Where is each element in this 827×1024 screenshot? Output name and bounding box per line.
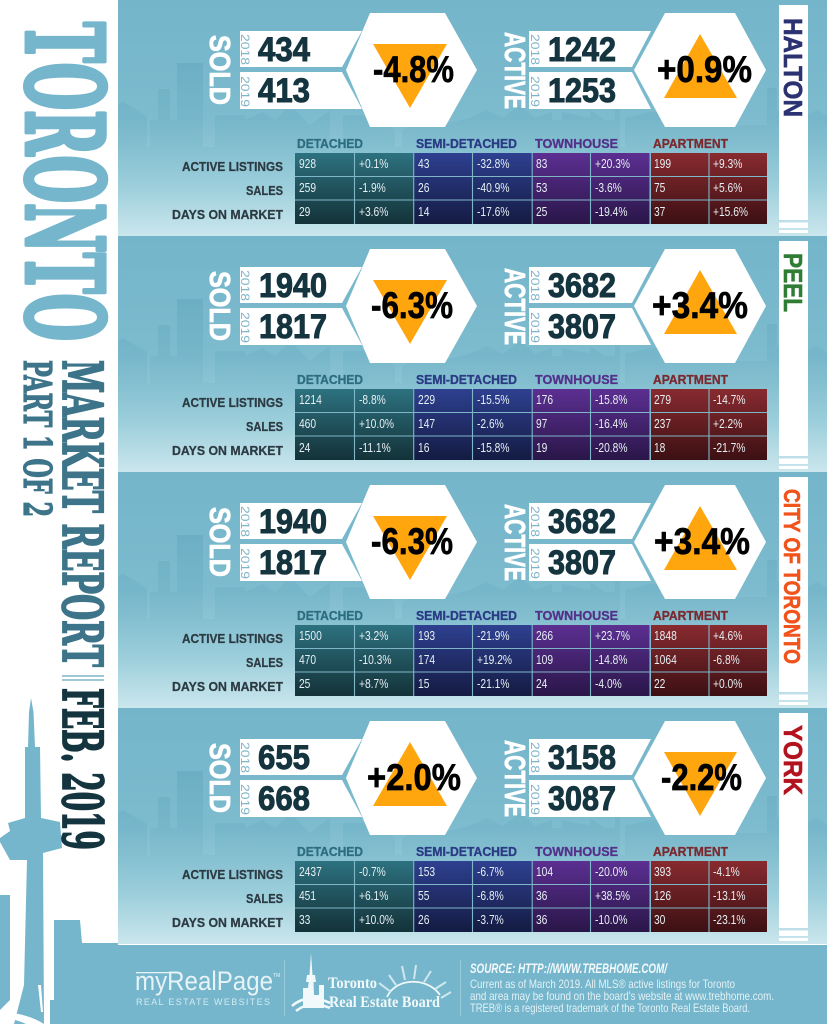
table: 24 (299, 442, 311, 455)
sold figures: 2019 (238, 312, 252, 343)
table: 199 (654, 158, 671, 171)
footer band (118, 945, 827, 1024)
active figures: 3807 (548, 308, 616, 346)
table: -3.7% (477, 914, 504, 927)
table: 16 (418, 442, 429, 455)
table: 153 (418, 866, 435, 879)
table: SEMI-DETACHED (416, 608, 517, 623)
logo: myRealPage (135, 966, 280, 1007)
subtitle: part number: PART 1 OF 2 (15, 360, 60, 517)
table (172, 608, 767, 696)
active change badge (661, 752, 742, 816)
sold figures: 1817 (259, 308, 327, 346)
table: 83 (536, 158, 547, 171)
table: -6.8% (713, 654, 740, 667)
table: 279 (654, 394, 671, 407)
table: 928 (299, 158, 316, 171)
active figures: 1242 (548, 31, 616, 69)
source note (470, 960, 774, 1015)
table: +8.7% (359, 678, 388, 691)
source note: TREB® is a registered trademark of the Toronto Real Estate Board. (470, 1001, 750, 1015)
table: -6.7% (477, 866, 504, 879)
table: TOWNHOUSE (535, 136, 618, 151)
sold label: SOLD (203, 743, 235, 813)
table: 33 (299, 914, 310, 927)
sold figures: 413 (258, 72, 310, 110)
active change badge (652, 270, 748, 334)
table: 37 (654, 206, 665, 219)
active figures (528, 31, 616, 110)
sold change badge (371, 280, 453, 344)
table: -0.7% (359, 866, 386, 879)
table: DAYS ON MARKET (172, 915, 283, 930)
logo: myRealPage: REAL ESTATE WEBSITES (136, 997, 270, 1007)
table: SALES (246, 891, 283, 906)
table (172, 372, 767, 460)
region name: Halton: HALTON (778, 18, 808, 117)
table: -10.3% (359, 654, 391, 667)
active figures (528, 267, 616, 346)
table: 19 (536, 442, 547, 455)
active change badge: -2.2% (661, 757, 742, 798)
table: 2437 (299, 866, 322, 879)
table: DAYS ON MARKET (172, 443, 283, 458)
table: SEMI-DETACHED (416, 844, 517, 859)
divider between report and date (62, 676, 104, 680)
table: ACTIVE LISTINGS (182, 159, 283, 174)
active figures: 2019 (528, 76, 542, 107)
table: DAYS ON MARKET (172, 679, 283, 694)
table: 29 (299, 206, 310, 219)
active figures: 2019 (528, 548, 542, 579)
table: 43 (418, 158, 429, 171)
panel: City of Toronto (118, 472, 827, 708)
sold figures: 2018 (238, 34, 252, 65)
source note: SOURCE: HTTP://WWW.TREBHOME.COM/ (470, 960, 668, 976)
region name: York: YORK (778, 725, 808, 795)
table: +10.0% (359, 418, 394, 431)
table: APARTMENT (653, 136, 728, 151)
sold change badge: +2.0% (367, 757, 461, 798)
sold figures: 1817 (259, 544, 327, 582)
active figures: 1253 (548, 72, 616, 110)
sold figures (238, 31, 310, 110)
table: DAYS ON MARKET (172, 207, 283, 222)
table: 26 (418, 914, 429, 927)
table: 26 (418, 182, 429, 195)
table: -6.8% (477, 890, 504, 903)
logo: Toronto Real Estate Board: Real Estate Board (329, 994, 440, 1011)
subtitle: Market Report: MARKET REPORT (50, 360, 115, 667)
source note: Current as of March 2019. All MLS® active listings for Toronto (470, 977, 735, 991)
table: 237 (654, 418, 671, 431)
table: 393 (654, 866, 671, 879)
table: -1.9% (359, 182, 386, 195)
table: +3.2% (359, 630, 388, 643)
table: 126 (654, 890, 671, 903)
table: DETACHED (297, 608, 363, 623)
table: -21.1% (477, 678, 509, 691)
sold figures: 2018 (238, 742, 252, 773)
active change badge: +3.4% (654, 521, 750, 562)
logo: Toronto Real Estate Board: Toronto (328, 975, 377, 992)
table: -15.8% (477, 442, 509, 455)
panel: Halton (118, 0, 827, 236)
table: 470 (299, 654, 316, 667)
table: +6.1% (359, 890, 388, 903)
sold figures: 434 (258, 31, 310, 69)
table: TOWNHOUSE (535, 372, 618, 387)
table: +0.1% (359, 158, 388, 171)
table: -2.6% (477, 418, 504, 431)
active change badge (654, 506, 750, 570)
table: SEMI-DETACHED (416, 372, 517, 387)
title: Toronto: TORONTO (2, 22, 127, 341)
sold figures: 655 (258, 739, 310, 777)
sold figures: 2019 (238, 548, 252, 579)
sold figures (238, 503, 327, 582)
table: 147 (418, 418, 435, 431)
active figures: 3682 (548, 267, 616, 305)
table: -15.8% (595, 394, 627, 407)
table: ACTIVE LISTINGS (182, 631, 283, 646)
white swoosh across the tower base (0, 985, 44, 1024)
table: APARTMENT (653, 608, 728, 623)
logo: myRealPage: myRealPage (135, 966, 273, 996)
table: SALES (246, 419, 283, 434)
table (172, 844, 767, 932)
table: +5.6% (713, 182, 742, 195)
table: SALES (246, 183, 283, 198)
table: -20.8% (595, 442, 627, 455)
table: 22 (654, 678, 665, 691)
table: 266 (536, 630, 553, 643)
table: -4.1% (713, 866, 740, 879)
logo: Toronto Real Estate Board (292, 953, 451, 1011)
table (172, 136, 767, 224)
table: 176 (536, 394, 553, 407)
sold figures (238, 267, 327, 346)
table: SALES (246, 655, 283, 670)
sold figures: 2018 (238, 270, 252, 301)
table: 55 (418, 890, 429, 903)
active change badge (657, 34, 752, 98)
table: 193 (418, 630, 435, 643)
sold change badge (371, 516, 453, 580)
table: ACTIVE LISTINGS (182, 867, 283, 882)
sold change badge (367, 742, 461, 806)
table: 15 (418, 678, 429, 691)
region name: City of Toronto: CITY OF TORONTO (779, 489, 805, 664)
active figures: 2018 (528, 34, 542, 65)
active label: ACTIVE (498, 268, 530, 345)
table: -20.0% (595, 866, 627, 879)
sold figures (238, 739, 310, 818)
sold figures: 2018 (238, 506, 252, 537)
active label: ACTIVE (498, 504, 530, 581)
table: 75 (654, 182, 665, 195)
sold figures: 1940 (259, 267, 327, 305)
table: -14.7% (713, 394, 745, 407)
table: DETACHED (297, 844, 363, 859)
active change badge: +3.4% (652, 285, 748, 326)
table: -21.9% (477, 630, 509, 643)
table: ACTIVE LISTINGS (182, 395, 283, 410)
table: -21.7% (713, 442, 745, 455)
sold label: SOLD (203, 271, 235, 341)
table: 460 (299, 418, 316, 431)
sold change badge: -6.3% (371, 521, 453, 562)
active label: ACTIVE (498, 740, 530, 817)
sold change badge: -6.3% (371, 285, 453, 326)
table: +2.2% (713, 418, 742, 431)
active figures: 2019 (528, 312, 542, 343)
table: +0.0% (713, 678, 742, 691)
sold label: SOLD (203, 35, 235, 105)
logo: myRealPage: TM (273, 973, 280, 979)
table: APARTMENT (653, 372, 728, 387)
table: 30 (654, 914, 665, 927)
table: -32.8% (477, 158, 509, 171)
table: DETACHED (297, 136, 363, 151)
active figures: 2019 (528, 784, 542, 815)
active figures: 3158 (548, 739, 616, 777)
table: 1214 (299, 394, 322, 407)
active figures (528, 503, 616, 582)
table: 25 (299, 678, 310, 691)
sold figures: 2019 (238, 76, 252, 107)
table: -13.1% (713, 890, 745, 903)
region name: Peel: PEEL (778, 253, 808, 312)
table: -19.4% (595, 206, 627, 219)
table: +3.6% (359, 206, 388, 219)
table: -11.1% (359, 442, 391, 455)
table: 14 (418, 206, 430, 219)
table: -40.9% (477, 182, 509, 195)
table: 109 (536, 654, 553, 667)
table: TOWNHOUSE (535, 844, 618, 859)
sold label: SOLD (203, 507, 235, 577)
sold figures: 1940 (259, 503, 327, 541)
table: +10.0% (359, 914, 394, 927)
table: 259 (299, 182, 316, 195)
table: +38.5% (595, 890, 630, 903)
table: APARTMENT (653, 844, 728, 859)
table: 36 (536, 914, 547, 927)
table: 104 (536, 866, 554, 879)
table: 24 (536, 678, 548, 691)
table: +20.3% (595, 158, 630, 171)
table: +9.3% (713, 158, 742, 171)
active figures: 2018 (528, 270, 542, 301)
table: 451 (299, 890, 316, 903)
table: 36 (536, 890, 547, 903)
table: -17.6% (477, 206, 509, 219)
table: +15.6% (713, 206, 748, 219)
active figures: 3682 (548, 503, 616, 541)
active figures: 3807 (548, 544, 616, 582)
active figures: 3087 (548, 780, 616, 818)
table: 97 (536, 418, 547, 431)
table: DETACHED (297, 372, 363, 387)
table: -15.5% (477, 394, 509, 407)
active figures (528, 739, 616, 818)
sold figures: 668 (258, 780, 310, 818)
illustration: CN Tower and skyline (0, 698, 118, 1024)
active figures: 2018 (528, 742, 542, 773)
table: 229 (418, 394, 435, 407)
table: 174 (418, 654, 436, 667)
table: 1848 (654, 630, 677, 643)
table: +19.2% (477, 654, 512, 667)
table: -14.8% (595, 654, 627, 667)
active change badge: +0.9% (657, 49, 752, 90)
active label: ACTIVE (498, 32, 530, 109)
sold change badge (373, 44, 454, 108)
table: 1500 (299, 630, 322, 643)
table: -8.8% (359, 394, 386, 407)
table: TOWNHOUSE (535, 608, 618, 623)
table: -23.1% (713, 914, 745, 927)
table: +4.6% (713, 630, 742, 643)
table: 1064 (654, 654, 677, 667)
table: 53 (536, 182, 547, 195)
table: -16.4% (595, 418, 627, 431)
active figures: 2018 (528, 506, 542, 537)
table: 18 (654, 442, 665, 455)
table: -3.6% (595, 182, 622, 195)
table: +23.7% (595, 630, 630, 643)
panel: Peel (118, 236, 827, 472)
sold figures: 2019 (238, 784, 252, 815)
subtitle: date: FEB. 2019 (50, 688, 115, 850)
table: -10.0% (595, 914, 627, 927)
panel: York (118, 708, 827, 944)
table: -4.0% (595, 678, 622, 691)
sold change badge: -4.8% (373, 49, 454, 90)
table: 25 (536, 206, 547, 219)
table: SEMI-DETACHED (416, 136, 517, 151)
